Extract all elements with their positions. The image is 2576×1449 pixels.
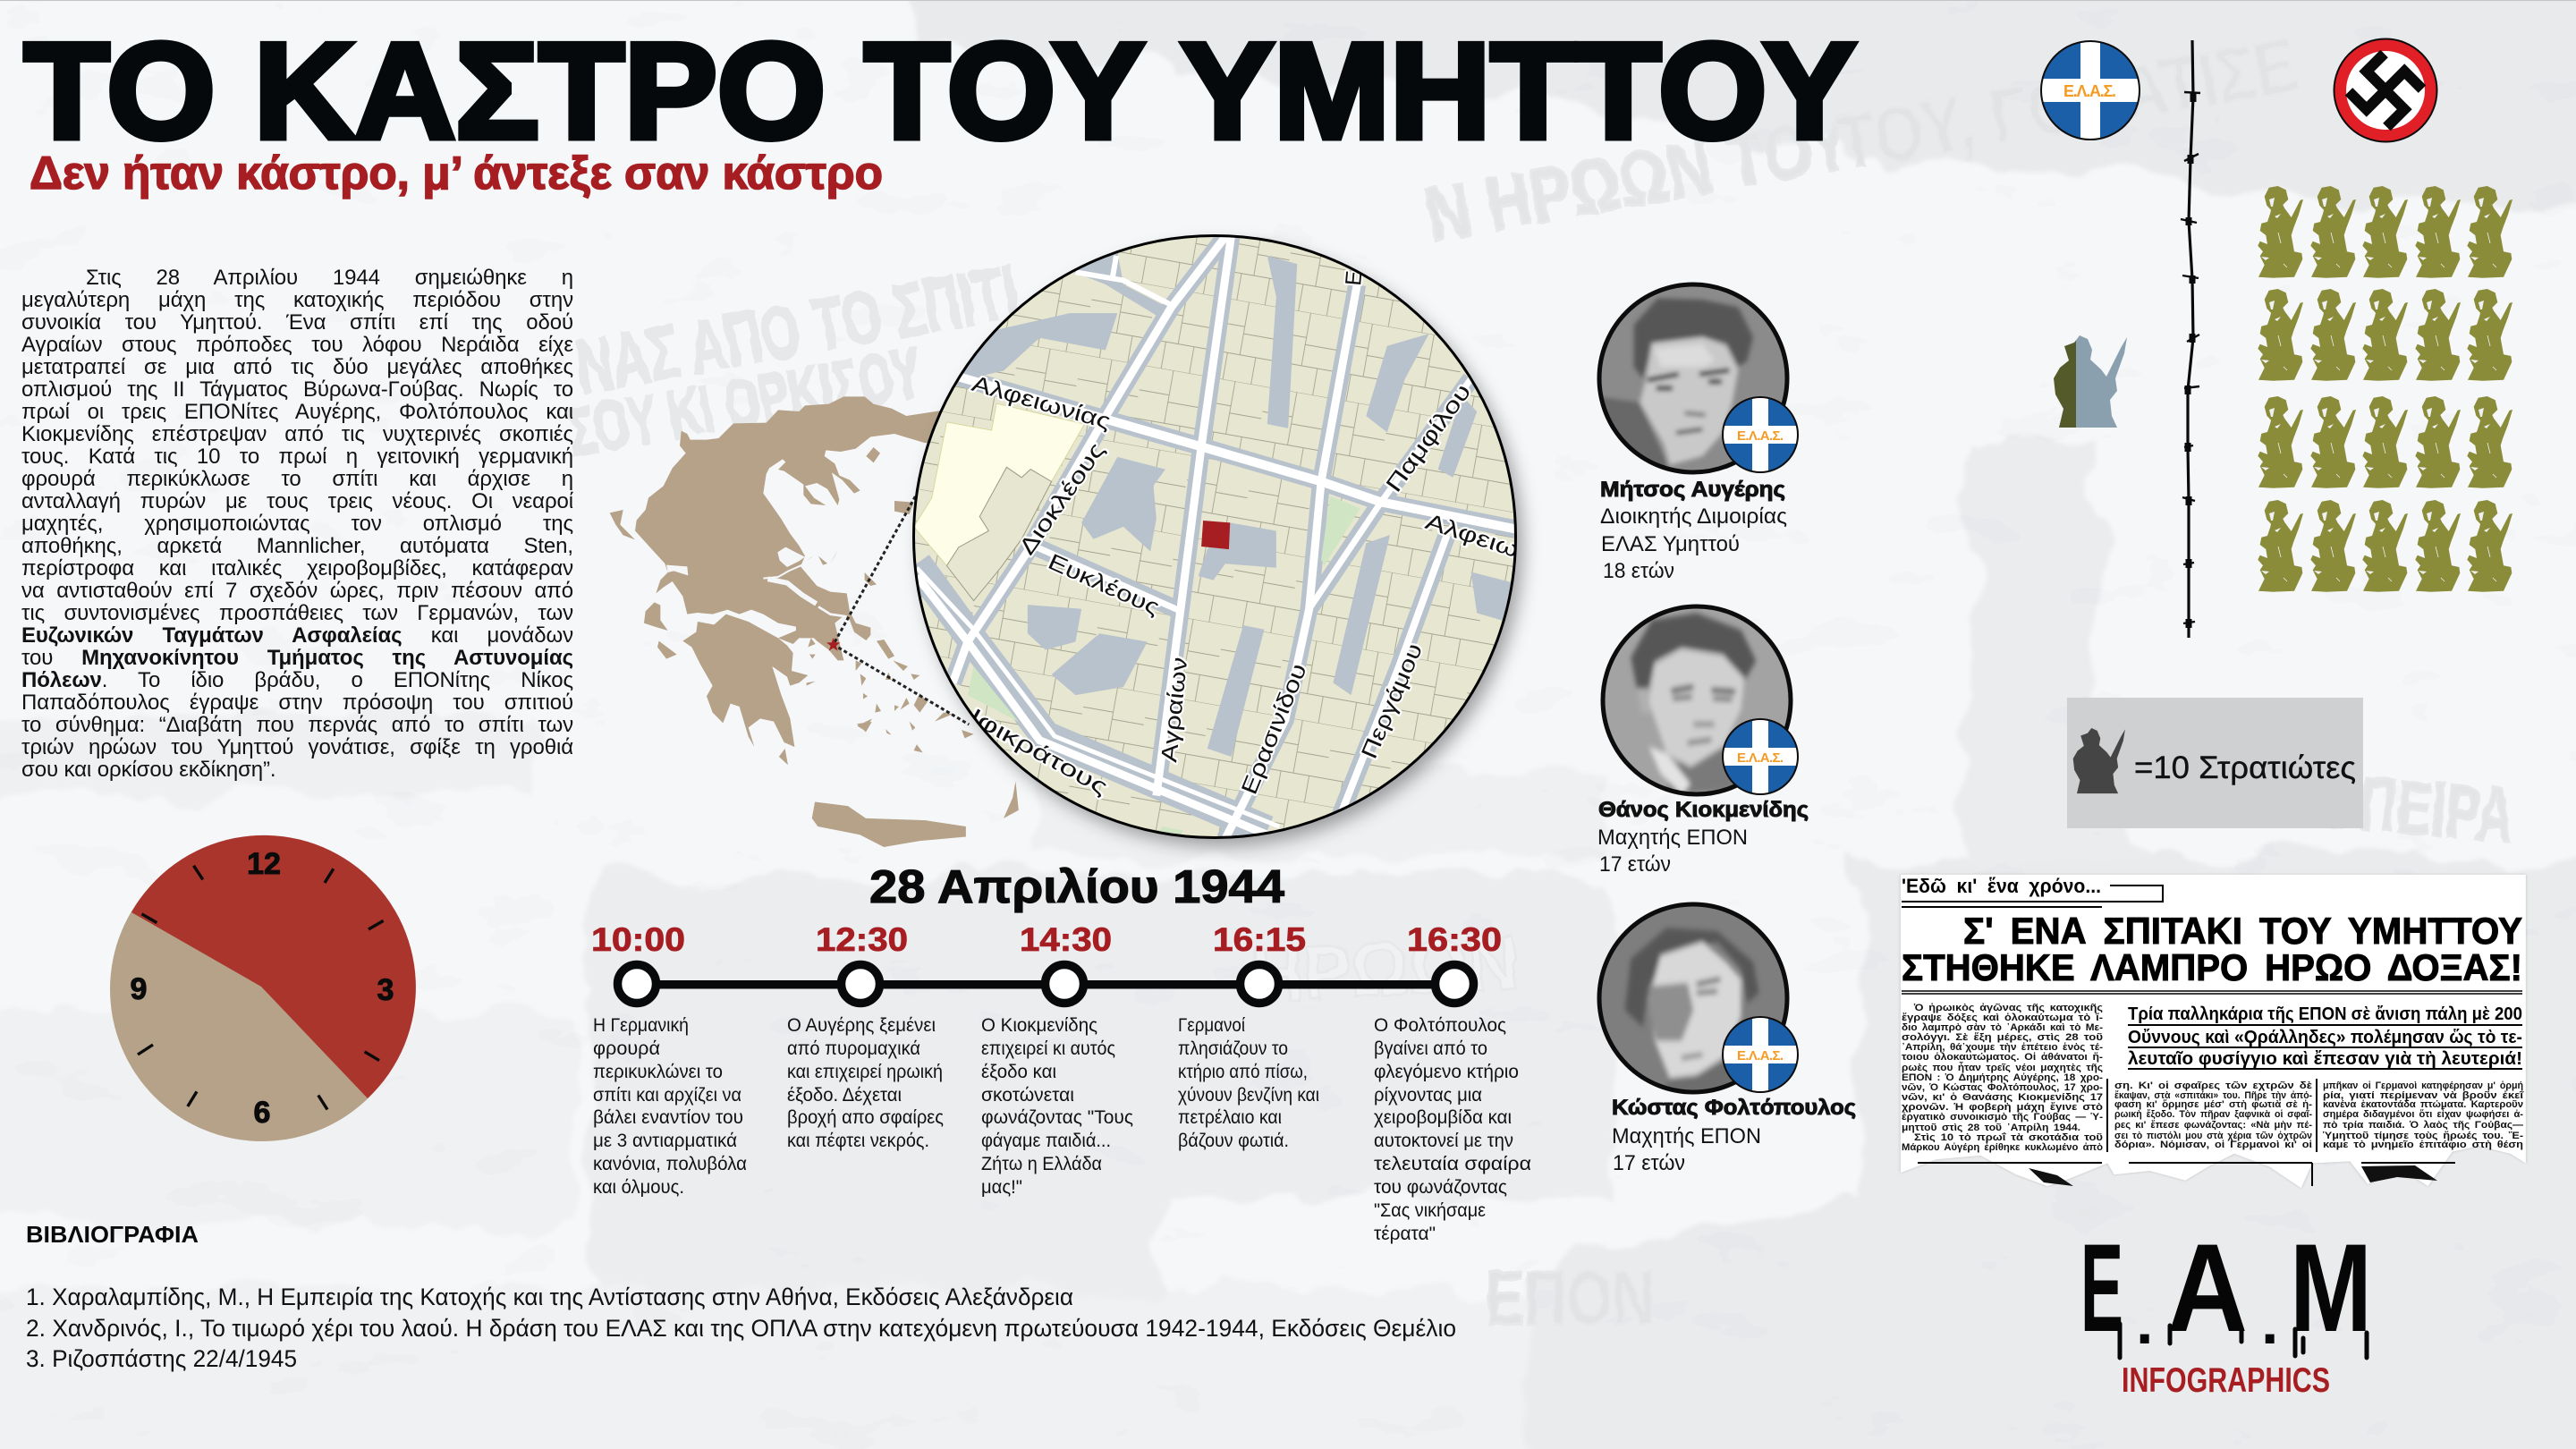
- newspaper clipping: Μάρκου Αὐγέρη ἐρίθηκε κυκλωμένο ἀπὸ: [1902, 1142, 2103, 1153]
- caption: Thanos Kiokmenidis: Μαχητής ΕΠΟΝ: [1597, 826, 1748, 850]
- map: street map in circle: [912, 233, 1525, 846]
- bibliography list: 1. Χαραλαμπίδης, Μ., Η Εμπειρία της Κατοχής και της Αντίστασης στην Αθήνα, Εκδόσεις Αλεξάνδρεια: [26, 1284, 1073, 1310]
- caption: Thanos Kiokmenidis: 17 ετών: [1599, 852, 1671, 877]
- timeline text 16:30: "Σας νικήσαμε: [1374, 1200, 1486, 1221]
- timeline text 14:30: επιχειρεί κι αυτός: [981, 1038, 1115, 1059]
- timeline text 16:15: κτήριο από πίσω,: [1178, 1062, 1308, 1082]
- clock chart: 6: [254, 1096, 270, 1130]
- timeline times: 16:30: [1407, 921, 1502, 958]
- newspaper clipping: ἔγραψε δόξες καὶ ὁλοκαύτωμα τὸ ἴ-: [1902, 1013, 2103, 1023]
- caption: Kostas Foltopoulos: Κώστας Φολτόπουλος: [1612, 1096, 1856, 1120]
- map street labels: Αλφειω: [1422, 509, 1522, 563]
- timeline text 16:30: χειροβομβίδα και: [1374, 1107, 1512, 1128]
- timeline axis with markers: [617, 964, 1474, 1004]
- icon: ELAS flag: [2041, 41, 2140, 140]
- timeline text 12:30: και επιχειρεί ηρωική: [787, 1062, 943, 1082]
- timeline text 14:30: Ζήτω η Ελλάδα: [981, 1154, 1102, 1174]
- background: faded wall photo: Ν ΗΡΩΩΝ ΤΟΥ: [1419, 100, 1857, 258]
- timeline text 16:15: πετρέλαιο και: [1178, 1107, 1282, 1128]
- map street labels: Παμφίλου: [1381, 379, 1476, 497]
- logo: E.A.M: Μ: [2290, 1217, 2372, 1358]
- timeline text 16:30: του φωνάζοντας: [1374, 1177, 1507, 1198]
- timeline text 16:15: βάζουν φωτιά.: [1178, 1131, 1289, 1151]
- newspaper clipping: Οὔννους καὶ «Ϙράλληδες» πολέμησαν ὥς τὸ τε-: [2128, 1028, 2522, 1047]
- map street labels: Αγραίων: [1157, 656, 1192, 764]
- newspaper clipping: λευταῖο φυσίγγιο καὶ ἔπεσαν γιὰ τὴ λευτεριά!: [2128, 1049, 2522, 1069]
- timeline text 16:30: φλεγόμενο κτήριο: [1374, 1062, 1519, 1082]
- logo: E.A.M: [2080, 1217, 2372, 1358]
- timeline text 16:15: πλησιάζουν το: [1178, 1038, 1288, 1059]
- timeline times: 14:30: [1020, 921, 1112, 958]
- icon grid: German soldiers: [2258, 186, 2512, 592]
- map street labels: [965, 269, 1522, 801]
- timeline text 16:15: [1178, 1015, 1319, 1151]
- caption: Mitsos Avgeris: 18 ετών: [1603, 559, 1674, 583]
- timeline times: 16:15: [1213, 921, 1306, 958]
- timeline text 12:30: βροχή απο σφαίρες: [787, 1107, 944, 1128]
- newspaper clipping: 'Εδῶ κι' ἕνα χρόνο...: [1902, 875, 2101, 897]
- map street labels: Διοκλέους: [1014, 438, 1110, 559]
- map street labels: Ε: [1341, 269, 1367, 287]
- newspaper clipping: σολόγγι. Σὲ ἕξη μέρες, στὶς 28 τοῦ: [1902, 1032, 2103, 1043]
- icon: ELAS flag: Ε.Λ.Α.Σ.: [2063, 82, 2116, 100]
- logo: E.A.M: Ε: [2080, 1217, 2123, 1358]
- map street labels: Ευκλέους: [1045, 549, 1163, 621]
- timeline text 12:30: Ο Αυγέρης ξεμένει: [787, 1015, 936, 1036]
- timeline text 16:30: Ο Φολτόπουλος: [1374, 1015, 1506, 1036]
- newspaper clipping: ᾿Απρίλη, θά᾿χουμε τὴν ἐπέτειο ἑνὸς τέ-: [1902, 1042, 2103, 1053]
- map street labels: Ιφικράτους: [965, 704, 1112, 801]
- timeline text 10:00: περικυκλώνει το: [593, 1062, 723, 1082]
- timeline text 10:00: κανόνια, πολυβόλα: [593, 1154, 747, 1174]
- map: Greece with star and dotted lines: [610, 396, 1019, 847]
- clock chart: [110, 835, 416, 1141]
- timeline text 14:30: μας!": [981, 1177, 1022, 1198]
- logo: INFOGRAPHICS: INFOGRAPHICS: [2122, 1361, 2330, 1400]
- timeline text 14:30: [981, 1015, 1133, 1198]
- small ELAS flag: Ε.Λ.Α.Σ.: [1737, 428, 1784, 444]
- newspaper clipping: πὸ τρία παιδιά. Ὁ λαὸς τῆς Γούβας—: [2323, 1120, 2523, 1131]
- newspaper clipping: Ὁ ἡρωικὸς ἀγῶνας τῆς κατοχικῆς: [1913, 1003, 2103, 1013]
- background: faded wall photo: ΕΠΟΝ: [1485, 1256, 1655, 1340]
- newspaper clipping: δόρια». Νόμισαν, οἱ Γερμανοὶ κι' οἱ: [2114, 1140, 2312, 1150]
- timeline text 12:30: [787, 1015, 944, 1151]
- timeline text 14:30: Ο Κιοκμενίδης: [981, 1015, 1097, 1036]
- timeline text 14:30: έξοδο και: [981, 1062, 1056, 1082]
- timeline text 16:30: τελευταία σφαίρα: [1374, 1154, 1531, 1174]
- bibliography heading: ΒΙΒΛΙΟΓΡΑΦΙΑ: [26, 1221, 199, 1248]
- caption: Kostas Foltopoulos: [1612, 1096, 1856, 1175]
- clock chart: 12: [247, 847, 281, 881]
- newspaper clipping: ΕΠΟΝ : Ὁ Δημήτρης Αὐγέρης, 18 χρο-: [1902, 1072, 2103, 1083]
- small ELAS flag: Ε.Λ.Α.Σ.: [1737, 1048, 1784, 1063]
- timeline text 12:30: από πυρομαχικά: [787, 1038, 920, 1059]
- timeline times: 12:30: [816, 921, 908, 958]
- newspaper clipping: σημέρα διδαγμένοι ὅτι εἶχαν ψωφήσει ἀ-: [2323, 1108, 2523, 1120]
- newspaper clipping: Τρία παλληκάρια τῆς ΕΠΟΝ σὲ ἄνιση πάλη μὲ 200: [2128, 1004, 2522, 1024]
- logo: E.A.M: .: [2136, 1287, 2153, 1357]
- newspaper clipping: μηττοῦ στὶς 28 τοῦ ᾿Απρίλη 1944.: [1902, 1123, 2080, 1133]
- clock chart: 9: [131, 972, 147, 1006]
- newspaper clipping: νῶν, Ὁ Κώστας Φολτόπουλος, 17 χρο-: [1902, 1082, 2103, 1093]
- icon: occupation forces emblem: [2334, 39, 2436, 141]
- newspaper clipping: χρονῶν. Ἡ φοβερὴ μάχη ἔγινε στὸ: [1902, 1102, 2103, 1113]
- newspaper clipping: ρες κι' ἔπεσε φωνάζοντας: «Νὰ μὴν πέ-: [2114, 1120, 2312, 1131]
- newspaper clipping: ΣΤΗΘΗΚΕ ΛΑΜΠΡΟ ΗΡΩΟ ΔΟΞΑΣ!: [1902, 946, 2522, 988]
- caption: Mitsos Avgeris: Μήτσος Αυγέρης: [1600, 478, 1785, 502]
- barbed wire divider: [2181, 40, 2200, 638]
- newspaper clipping: ρία, γιατί περίμεναν νὰ βροῦν ἐκεῖ: [2323, 1090, 2524, 1101]
- icon: legend soldier: [2073, 728, 2125, 793]
- timeline heading: 28 Απριλίου 1944: [869, 861, 1284, 913]
- timeline text 14:30: φάγαμε παιδιά...: [981, 1131, 1111, 1151]
- newspaper clipping: ρωὲς που ἦταν τρεῖς νέοι μαχητὲς τῆς: [1902, 1061, 2103, 1073]
- timeline text 12:30: και πέφτει νεκρός.: [787, 1131, 929, 1151]
- caption: Mitsos Avgeris: ΕΛΑΣ Υμηττού: [1601, 532, 1740, 556]
- timeline times: [591, 921, 1502, 958]
- newspaper clipping: ἐργατικὸ συνοικισμὸ τῆς Γούβας — Ὑ-: [1902, 1112, 2103, 1123]
- newspaper clipping: [1901, 875, 2526, 1188]
- caption: Mitsos Avgeris: Διοικητής Διμοιρίας: [1600, 504, 1787, 529]
- timeline text 16:30: ρίχνοντας μια: [1374, 1085, 1482, 1106]
- background: faded wall photo: ΝΑΣ ΑΠΟ ΤΟ ΣΠΙΤΙ: [570, 249, 1025, 410]
- newspaper clipping: Σ' ΕΝΑ ΣΠΙΤΑΚΙ ΤΟΥ ΥΜΗΤΤΟΥ: [1963, 910, 2522, 952]
- timeline text 16:30: τέρατα": [1374, 1224, 1436, 1244]
- clock chart: 3: [377, 973, 394, 1007]
- timeline text 14:30: φωνάζοντας "Τους: [981, 1107, 1133, 1128]
- caption: Mitsos Avgeris: [1600, 478, 1787, 583]
- subtitle: Δεν ήταν κάστρο, μ’ άντεξε σαν κάστρο: [30, 148, 883, 199]
- timeline text 10:00: σπίτι και αρχίζει να: [593, 1085, 741, 1106]
- timeline text 10:00: και όλμους.: [593, 1177, 684, 1198]
- newspaper clipping: καμε τὸ μνημεῖο ἐπιτάφιο στὴ θέση: [2323, 1140, 2523, 1150]
- portrait: Thanos Kiokmenidis: [1603, 606, 1798, 794]
- caption: Thanos Kiokmenidis: [1597, 798, 1809, 877]
- map street labels: Περγάμου: [1357, 640, 1428, 762]
- timeline text 12:30: έξοδο. Δέχεται: [787, 1085, 902, 1106]
- newspaper clipping: σει τὸ πιστόλι μου στὰ χέρια τῶν ὀχτρῶν: [2114, 1131, 2312, 1141]
- timeline text 16:15: Γερμανοί: [1178, 1015, 1245, 1036]
- small ELAS flag: [1723, 397, 1798, 472]
- timeline text 10:00: [593, 1015, 747, 1198]
- newspaper clipping: ρωικὴ ἔξοδο. Τὸν πῆραν ξαφνικὰ οἱ σφαῖ-: [2114, 1109, 2312, 1120]
- small ELAS flag: [1723, 1017, 1798, 1092]
- newspaper clipping: Στὶς 10 τὸ πρωΐ τὰ σκοτάδια τοῦ: [1914, 1132, 2103, 1143]
- bibliography list: 3. Ριζοσπάστης 22/4/1945: [26, 1345, 297, 1372]
- newspaper clipping: κανένα ἑκατοντάδα πτώματα. Καρτεροῦν: [2323, 1099, 2523, 1110]
- newspaper clipping: Ὑμηττοῦ τίμησε τοὺς ἥρωές του. Ἔ-: [2323, 1131, 2523, 1141]
- timeline text 10:00: Η Γερμανική: [593, 1015, 689, 1036]
- portrait: Kostas Foltopoulos: [1599, 904, 1798, 1096]
- portrait: Mitsos Avgeris: [1598, 284, 1798, 480]
- timeline text 10:00: βάλει εναντίον του: [593, 1107, 743, 1128]
- bibliography list: [26, 1284, 1456, 1372]
- timeline text 16:30: αυτοκτονεί με την: [1374, 1131, 1513, 1151]
- timeline text 16:30: [1374, 1015, 1531, 1244]
- newspaper clipping: ση. Κι' οἱ σφαῖρες τῶν εχτρῶν δὲ: [2114, 1080, 2313, 1091]
- map street labels: Αλφειωνίας: [969, 371, 1114, 435]
- icon: ELAS soldier: [2054, 335, 2127, 428]
- legend box: [2067, 698, 2363, 828]
- timeline text 10:00: με 3 αντιαρματικά: [593, 1131, 737, 1151]
- background: faded wall photo: ΗΡΩΩΝ: [1249, 919, 1521, 1018]
- article text: [21, 267, 573, 781]
- newspaper clipping: νῶν, κι' ὁ Θανάσης Κιοκμενίδης 17: [1902, 1092, 2103, 1103]
- newspaper clipping: μπῆκαν οἱ Γερμανοὶ κατηφέρησαν μ' ὁρμή: [2323, 1080, 2523, 1091]
- map street labels: Ερασινίδου: [1237, 660, 1312, 798]
- logo: E.A.M: .: [2261, 1287, 2278, 1357]
- newspaper clipping: ἔκαψαν, στὰ «σπιτάκι» του. Πῆρε τὴν ἀπό-: [2114, 1090, 2312, 1101]
- small ELAS flag: [1723, 719, 1798, 794]
- background: faded wall photo: ΤΟΥ, ΓΟΝΑΤΙΣΕ: [1831, 22, 2303, 186]
- background: faded wall photo: ΣΟΥ ΚΙ ΟΡΚΙΣΟΥ: [562, 335, 928, 471]
- timeline text 16:15: χύνουν βενζίνη και: [1178, 1085, 1319, 1106]
- timeline times: 10:00: [591, 921, 685, 958]
- caption: Kostas Foltopoulos: Μαχητής ΕΠΟΝ: [1612, 1124, 1761, 1148]
- timeline text 10:00: φρουρά: [593, 1038, 660, 1059]
- small ELAS flag: Ε.Λ.Α.Σ.: [1737, 750, 1784, 766]
- newspaper clipping: φαση κι' ὅρμησε μέσ' στὴ φωτιὰ σὲ ἡ-: [2114, 1099, 2312, 1110]
- timeline text 16:30: βγαίνει από το: [1374, 1038, 1487, 1059]
- newspaper clipping: τοιου ὁλοκαυτώματος. Οἱ ἀθάνατοι ἥ-: [1902, 1052, 2103, 1063]
- logo: E.A.M: Α: [2167, 1217, 2248, 1358]
- newspaper clipping: διο λαμπρὸ σὰν τὸ ᾿Αρκάδι καὶ τὸ Με-: [1902, 1022, 2103, 1033]
- title: ΤΟ ΚΑΣΤΡΟ ΤΟΥ ΥΜΗΤΤΟΥ: [24, 15, 1856, 167]
- caption: Thanos Kiokmenidis: Θάνος Κιοκμενίδης: [1598, 798, 1809, 822]
- legend box: =10 Στρατιώτες: [2134, 750, 2356, 785]
- bibliography list: 2. Χανδρινός, Ι., Το τιμωρό χέρι του λαού. Η δράση του ΕΛΑΣ και της ΟΠΛΑ στην κατεχόμενη πρωτεύουσα 1942-1944, Εκδόσεις Θεμέλιο: [26, 1315, 1456, 1342]
- caption: Kostas Foltopoulos: 17 ετών: [1613, 1151, 1685, 1175]
- timeline text 14:30: σκοτώνεται: [981, 1085, 1074, 1106]
